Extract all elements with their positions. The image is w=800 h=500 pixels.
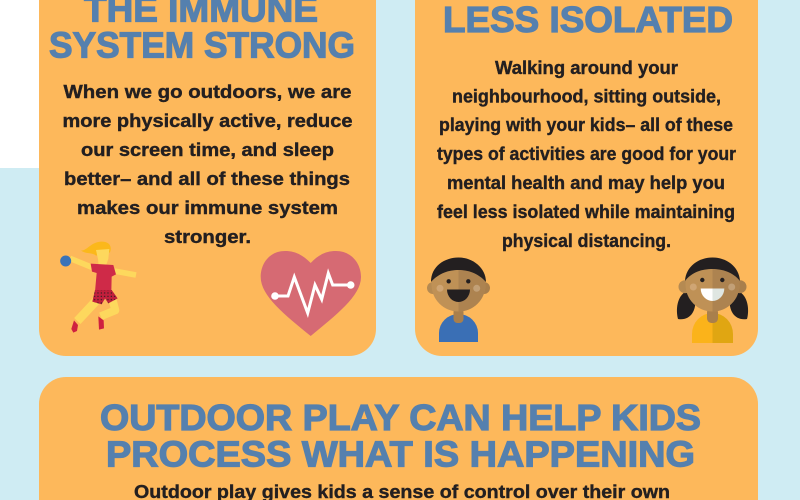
text: immune system body [62,81,352,247]
panel: immune system [39,0,376,356]
icon: smiling girl [677,258,748,343]
text: less isolated body: types of activities are good for your [437,143,736,164]
heading: process what is happening: PROCESS WHAT IS HAPPENING [106,434,695,474]
panel: process what is happening [39,377,758,500]
icon: smiling boy [427,258,490,342]
heading: less isolated: LESS ISOLATED [443,0,733,40]
text: immune system body: more physically active, reduce [62,110,352,131]
text: immune system body: When we go outdoors, we are [64,81,352,102]
heading: immune system [49,0,355,66]
icon: girl throwing ball [60,242,136,333]
panel: less isolated [415,0,758,356]
text: less isolated body: neighbourhood, sitting outside, [452,86,721,106]
text: less isolated body: playing with your kids– all of these [439,114,733,135]
text: less isolated body: physical distancing. [502,230,671,251]
heading: immune system: SYSTEM STRONG [49,24,355,66]
icon: heart with pulse [261,251,361,336]
text: immune system body: our screen time, and sleep [81,139,334,160]
text: less isolated body: feel less isolated while maintaining [437,201,735,222]
text: immune system body: makes our immune system [77,197,338,218]
text: less isolated body [437,57,736,251]
text: less isolated body: mental health and may help you [447,172,725,193]
text: immune system body: stronger. [164,226,251,247]
text: less isolated body: Walking around your [495,57,678,78]
text: immune system body: better– and all of these things [64,168,350,189]
heading: process what is happening [100,397,701,474]
heading: process what is happening: OUTDOOR PLAY CAN HELP KIDS [100,397,701,438]
